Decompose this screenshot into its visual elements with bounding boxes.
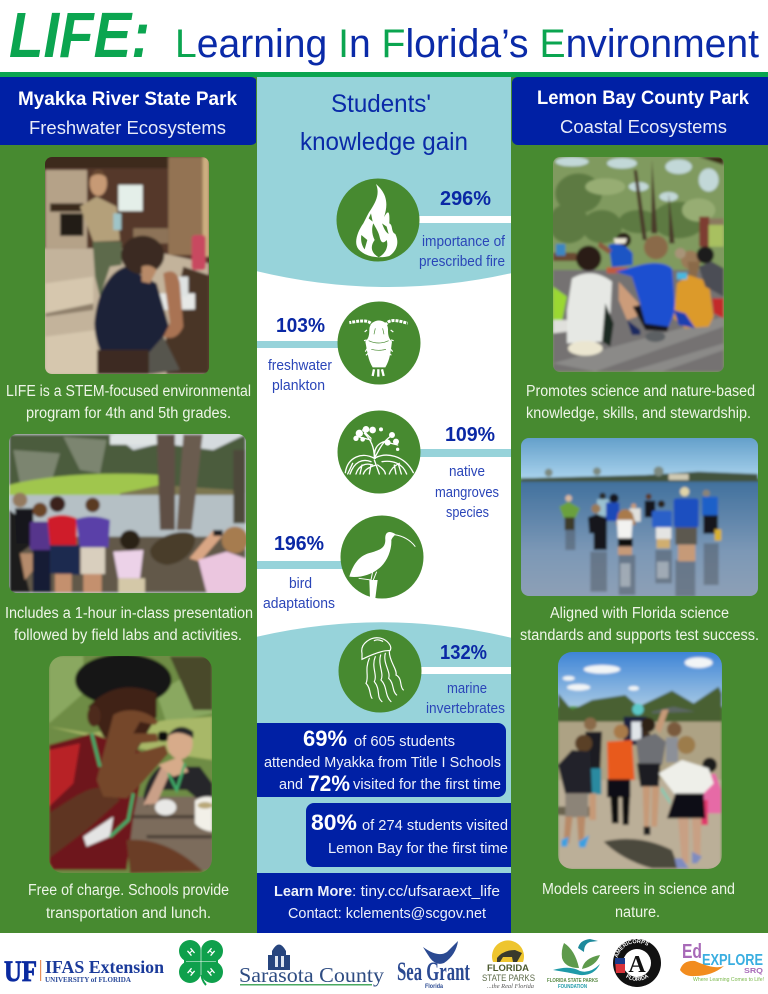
contact box: Contact: kclements@scgov.net bbox=[288, 906, 486, 922]
top teal wave bbox=[256, 77, 512, 287]
callout: Myakka attendance bbox=[257, 723, 506, 797]
label bbox=[268, 358, 332, 394]
label: importance of bbox=[422, 234, 506, 250]
logo: EdExplore SRQ bbox=[680, 941, 764, 983]
contact box: Learn More bbox=[274, 884, 352, 900]
callout: Myakka attendance: of 605 students bbox=[354, 734, 455, 750]
stat: bird adaptations bbox=[257, 516, 424, 612]
logo: UF IFAS Extension: UF bbox=[4, 955, 37, 988]
stat: prescribed fire bbox=[336, 178, 512, 270]
text: cost description bbox=[28, 882, 229, 922]
logo: 4-H clover bbox=[179, 940, 223, 985]
text: presentation description: Includes a 1-hour in-class presentation bbox=[5, 605, 253, 622]
value: 109% bbox=[445, 424, 495, 446]
callout: Myakka attendance: visited for the first time bbox=[353, 777, 501, 793]
callout: Myakka attendance: 72% bbox=[308, 771, 350, 796]
callout: Lemon Bay attendance bbox=[306, 803, 512, 867]
text: careers description: Models careers in science and bbox=[542, 881, 735, 898]
photo: student holding a small object bbox=[47, 653, 215, 877]
title bbox=[9, 0, 759, 71]
contact box: : tiny.cc/ufsaraext_life bbox=[352, 884, 500, 900]
park header bbox=[512, 77, 768, 145]
value: 296% bbox=[440, 188, 491, 210]
callout: Lemon Bay attendance: Lemon Bay for the first time bbox=[328, 841, 508, 857]
label: prescribed fire bbox=[419, 254, 505, 270]
icon: mangrove bbox=[345, 426, 413, 474]
heading: students knowledge gain: Students' bbox=[331, 90, 431, 118]
text: stewardship description: Promotes science and nature-based bbox=[526, 383, 755, 400]
icon: jellyfish bbox=[362, 638, 403, 702]
logo: 4-H clover: H bbox=[185, 946, 197, 958]
label bbox=[435, 464, 499, 521]
logo strip bbox=[4, 939, 764, 990]
park header: Freshwater Ecosystems bbox=[29, 117, 226, 138]
logo: 4-H clover: H bbox=[185, 966, 197, 978]
label: plankton bbox=[272, 378, 325, 394]
logo: Florida State Parks: STATE PARKS bbox=[482, 973, 535, 984]
stat: marine invertebrates bbox=[338, 630, 512, 717]
logo: 4-H clover: H bbox=[205, 966, 217, 978]
center column left edge bbox=[256, 77, 257, 933]
photo: students with instructor in field bbox=[555, 650, 724, 870]
label: marine bbox=[447, 681, 487, 697]
logo: AmeriCorps Florida: FLORIDA bbox=[626, 974, 649, 981]
icon: ibis bbox=[349, 532, 415, 598]
label: native bbox=[449, 464, 485, 480]
park header: Coastal Ecosystems bbox=[560, 116, 727, 137]
text: presentation description: followed by field labs and activities. bbox=[14, 627, 242, 644]
logo: EdExplore SRQ: Ed bbox=[682, 941, 702, 963]
logo: Florida State Parks bbox=[482, 940, 535, 990]
text: stewardship description bbox=[526, 383, 755, 422]
logo: Florida State Parks Foundation: FLORIDA STATE PARKS bbox=[547, 978, 598, 984]
heading: students knowledge gain bbox=[300, 90, 468, 156]
callout: Lemon Bay attendance: of 274 students visited bbox=[362, 818, 508, 834]
label: bird bbox=[289, 576, 312, 592]
label: adaptations bbox=[263, 596, 335, 612]
panel: Myakka River State Park bbox=[0, 77, 257, 933]
text: standards description bbox=[520, 605, 759, 644]
text: stewardship description: knowledge, skills, and stewardship. bbox=[526, 405, 751, 422]
logo: Sea Grant Florida: Florida bbox=[425, 984, 444, 990]
logo: Florida State Parks: FLORIDA bbox=[487, 963, 529, 974]
logo: Florida State Parks Foundation bbox=[547, 939, 600, 990]
logo: 4-H clover: H bbox=[205, 946, 217, 958]
panel: center knowledge gain bbox=[256, 77, 512, 933]
heading: students knowledge gain: knowledge gain bbox=[300, 128, 468, 156]
logo: Florida State Parks: ...the Real Florida bbox=[487, 984, 534, 990]
park header: Myakka River State Park bbox=[18, 89, 237, 110]
photo: students wading in the bay bbox=[519, 435, 762, 598]
text: careers description bbox=[542, 881, 735, 921]
logo: UF IFAS Extension: UNIVERSITY of FLORIDA bbox=[45, 976, 131, 984]
callout: Lemon Bay attendance: 80% bbox=[311, 810, 357, 835]
logo: AmeriCorps Florida bbox=[613, 939, 661, 987]
photo: ranger and student at microscope bbox=[40, 153, 213, 380]
title divider bbox=[0, 72, 768, 77]
icon: flame bbox=[356, 184, 397, 257]
text: cost description: Free of charge. Schools provide bbox=[28, 882, 229, 899]
text: program description bbox=[6, 383, 251, 422]
logo: UF IFAS Extension: IFAS Extension bbox=[45, 957, 164, 977]
logo: EdExplore SRQ: Where Learning Comes to Life! bbox=[693, 977, 764, 983]
stat: native mangroves bbox=[338, 410, 512, 521]
logo: AmeriCorps Florida: AMERICORPS bbox=[614, 939, 649, 958]
value: 103% bbox=[276, 315, 325, 337]
logo: Florida State Parks Foundation: FOUNDATION bbox=[558, 984, 587, 990]
callout: Myakka attendance: 69% bbox=[303, 726, 347, 751]
label: invertebrates bbox=[426, 701, 505, 717]
text: cost description: transportation and lunch. bbox=[46, 905, 211, 922]
logo: EdExplore SRQ: SRQ bbox=[744, 968, 764, 975]
callout: Myakka attendance: attended Myakka from Title I Schools bbox=[264, 755, 501, 771]
label: freshwater bbox=[268, 358, 332, 374]
label: species bbox=[446, 505, 489, 521]
title: full program name: Learning In Florida’s Environment bbox=[175, 22, 759, 66]
contact box bbox=[257, 873, 512, 933]
panel: Lemon Bay County Park bbox=[511, 77, 768, 933]
label: mangroves bbox=[435, 485, 499, 501]
text: careers description: nature. bbox=[615, 904, 660, 921]
logo: Sea Grant Florida: Sea Grant bbox=[397, 957, 470, 986]
text: standards description: Aligned with Florida science bbox=[550, 605, 729, 622]
logo: UF IFAS Extension bbox=[4, 955, 164, 988]
park header: Lemon Bay County Park bbox=[537, 88, 749, 109]
logo: Sea Grant Florida bbox=[397, 941, 470, 990]
text: program description: LIFE is a STEM-focused environmental bbox=[6, 383, 251, 400]
label bbox=[263, 576, 335, 612]
callout: Myakka attendance: and bbox=[279, 777, 303, 793]
photo: students with binoculars at river bbox=[7, 432, 250, 595]
label bbox=[419, 234, 506, 270]
value: 132% bbox=[440, 642, 487, 664]
text: presentation description bbox=[5, 605, 253, 644]
title: LIFE: LIFE: bbox=[9, 0, 150, 71]
icon: plankton bbox=[349, 320, 408, 377]
park header bbox=[0, 77, 257, 145]
bottom teal wave bbox=[256, 622, 512, 933]
logo: Sarasota County: Sarasota County bbox=[239, 963, 385, 987]
stat: freshwater plankton bbox=[257, 302, 420, 394]
value: 196% bbox=[274, 533, 324, 555]
text: program description: program for 4th and 5th grades. bbox=[26, 405, 231, 422]
photo: students in a circle on a deck bbox=[549, 153, 727, 375]
logo: Sarasota County bbox=[239, 944, 385, 987]
label bbox=[426, 681, 505, 717]
logo: AmeriCorps Florida: A bbox=[628, 952, 646, 978]
